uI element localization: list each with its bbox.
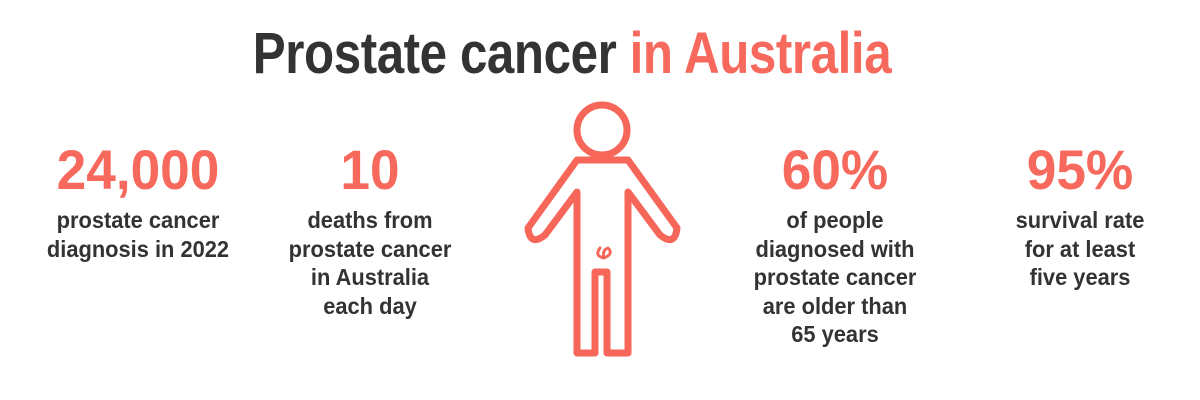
stat: survival: five years <box>1030 264 1130 290</box>
stat: age: prostate cancer <box>754 264 916 290</box>
stat: survival <box>1016 138 1144 290</box>
stat: survival: for at least <box>1025 236 1135 262</box>
stat: diagnoses: diagnosis in 2022 <box>47 236 229 262</box>
stat: age: are older than <box>763 292 907 318</box>
stat: survival: survival rate <box>1016 207 1144 233</box>
stat: deaths <box>289 138 452 319</box>
stat: deaths: each day <box>323 292 417 318</box>
stat: deaths: prostate cancer <box>289 236 451 262</box>
stat: age: 65 years <box>791 321 879 347</box>
title: Prostate cancer in Australia <box>253 21 891 86</box>
stat: deaths: 10 <box>340 138 400 201</box>
stat: deaths: in Australia <box>311 264 429 290</box>
stat: diagnoses: 24,000 <box>57 138 219 201</box>
stat: age: of people <box>786 207 884 233</box>
stat: diagnoses: prostate cancer <box>57 207 219 233</box>
stat: deaths: deaths from <box>307 207 433 233</box>
stat: age: 60% <box>782 138 888 201</box>
stat: age <box>754 138 916 347</box>
stat: survival: 95% <box>1027 138 1133 201</box>
stat: diagnoses <box>47 138 229 262</box>
stat: age: diagnosed with <box>755 236 915 262</box>
